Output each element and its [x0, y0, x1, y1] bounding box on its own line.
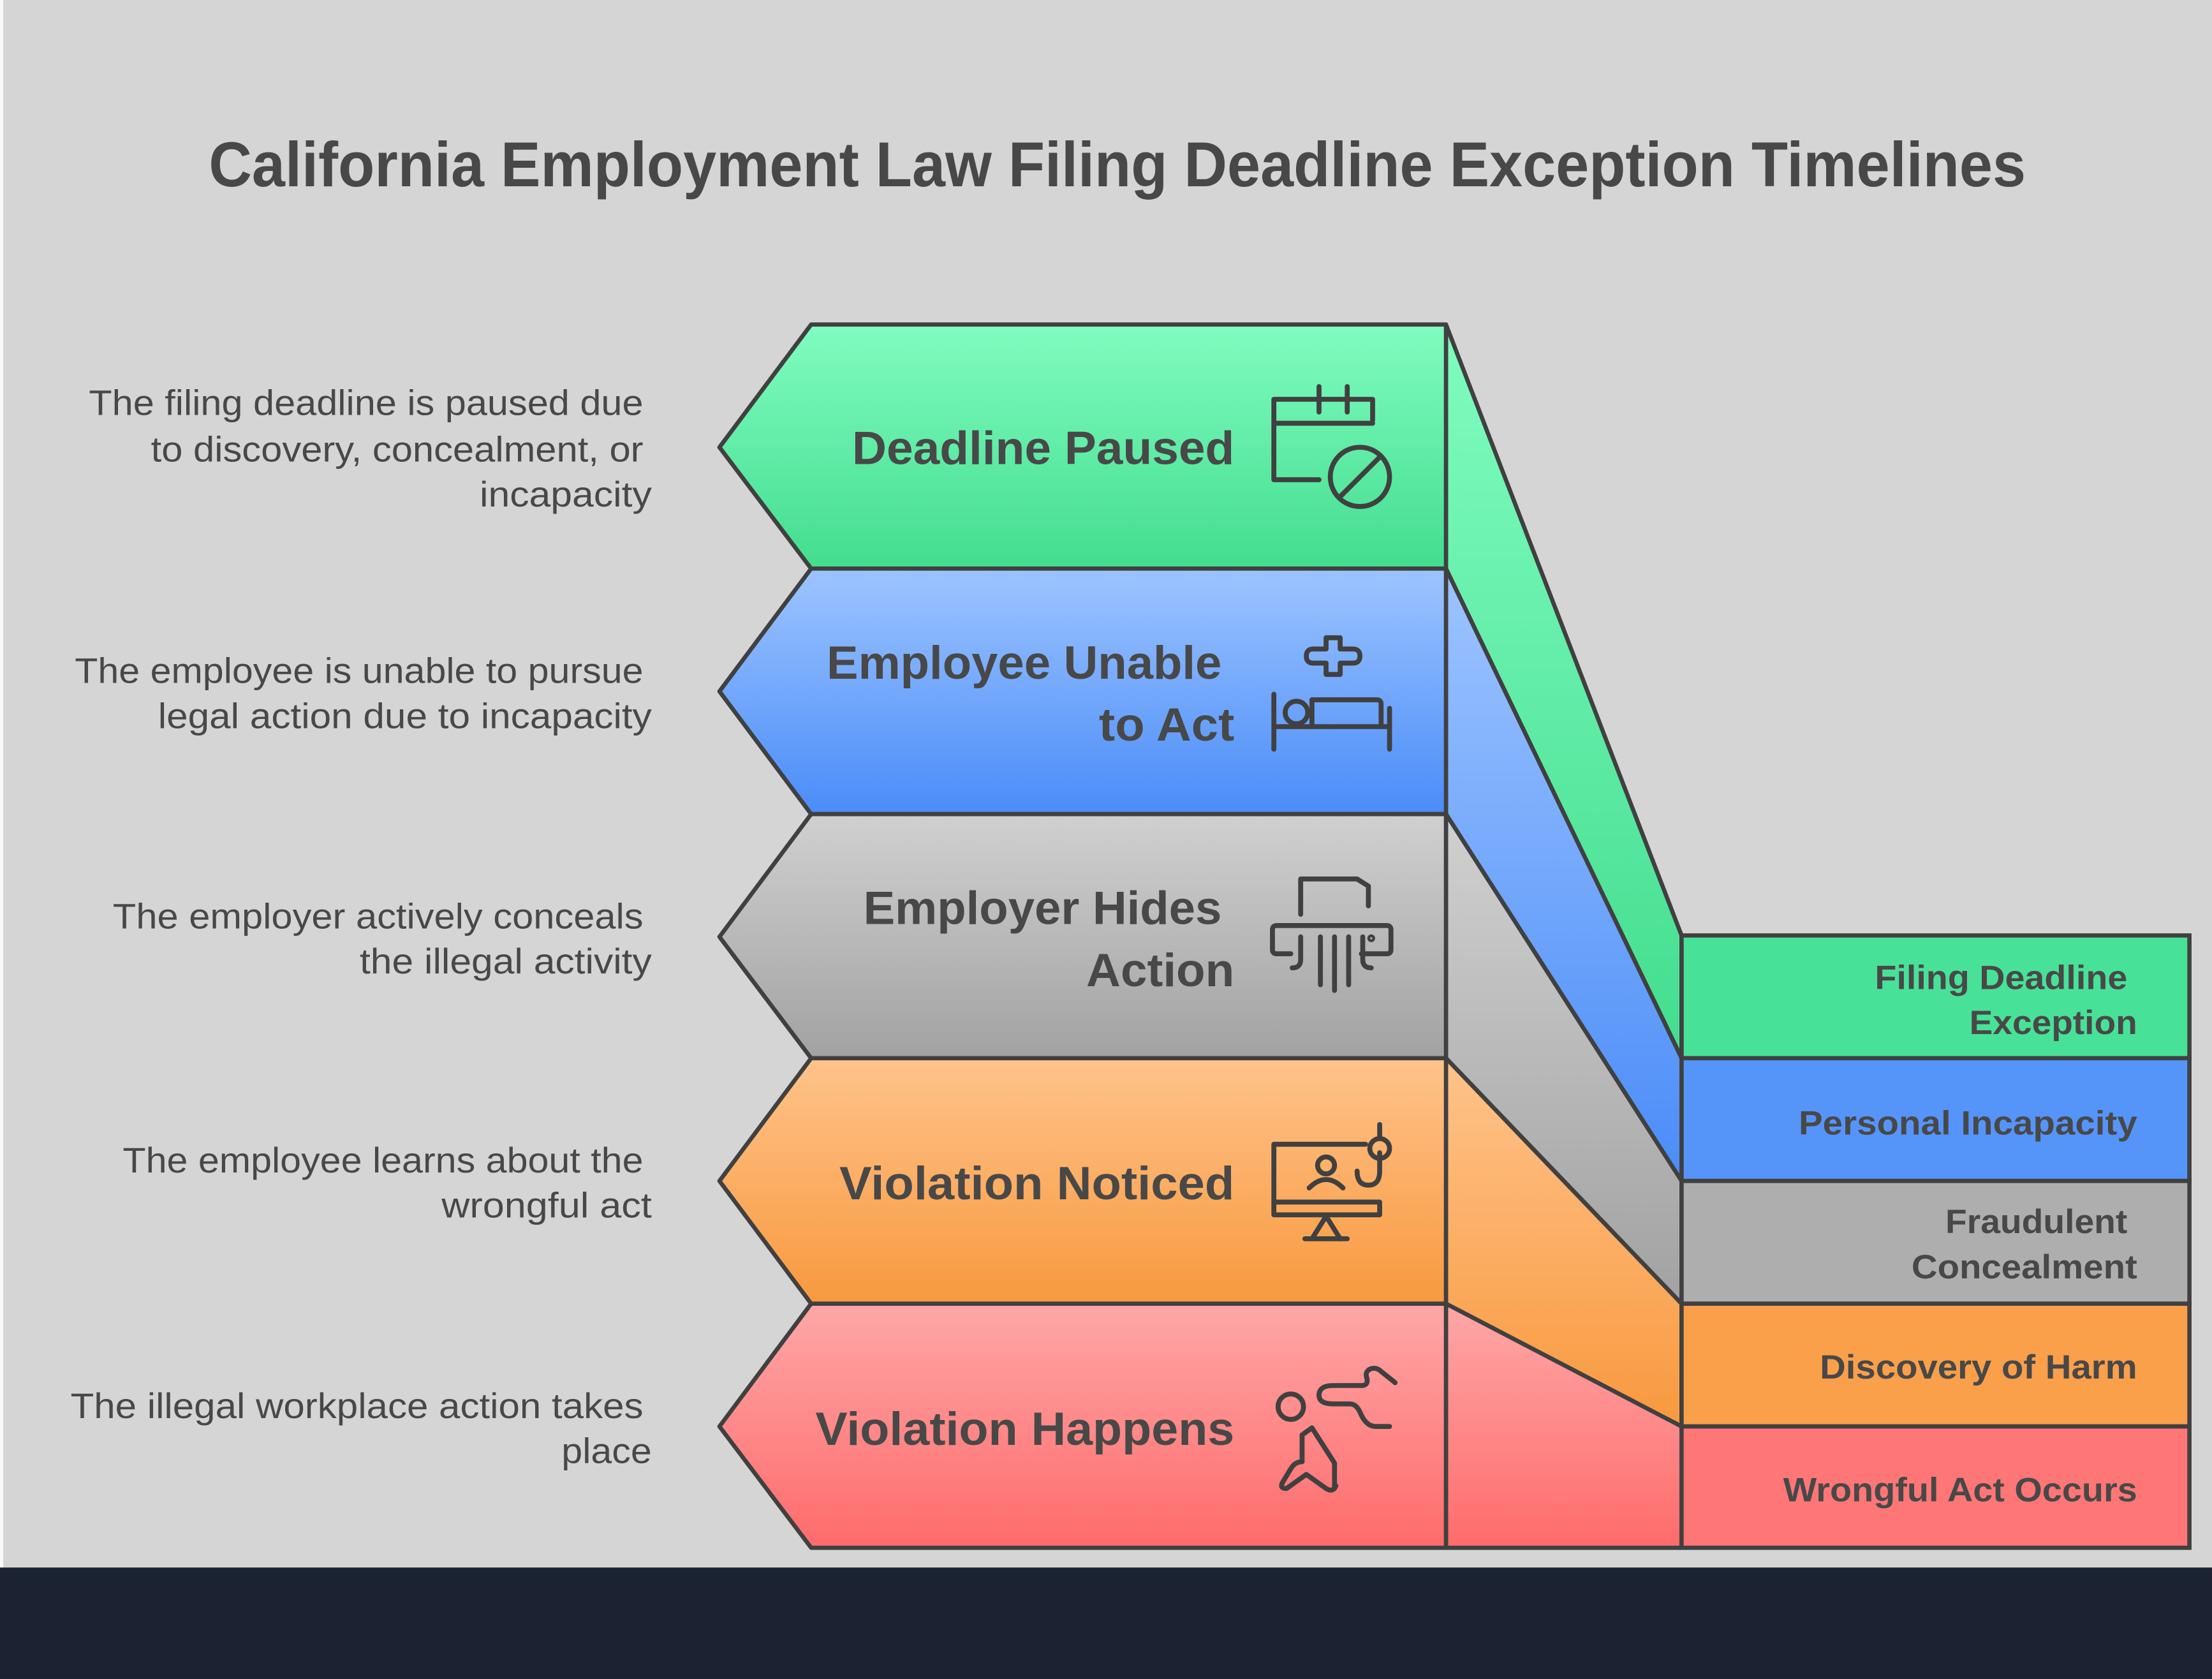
arrow labels [815, 423, 1234, 1455]
left descriptions: The filing deadline is paused due [89, 383, 644, 422]
face: blue [1446, 568, 1681, 1181]
right labels: Fraudulent [1945, 1203, 2128, 1241]
left descriptions: The employer actively conceals [113, 896, 644, 936]
right labels: Concealment [1912, 1248, 2137, 1286]
box: Filing Deadline Exception [1681, 935, 2190, 1058]
right boxes [1681, 935, 2190, 1548]
arrow labels: to Act [1099, 699, 1234, 751]
face: orange [1446, 1058, 1681, 1426]
arrow: Violation Noticed [719, 1058, 1446, 1304]
arrow labels: Action [1086, 945, 1234, 996]
left descriptions: The employee learns about the [122, 1141, 644, 1180]
arrow: Violation Happens [719, 1304, 1446, 1548]
side faces [1446, 325, 1681, 1548]
left descriptions: The employee is unable to pursue [75, 651, 644, 690]
left descriptions: legal action due to incapacity [158, 696, 652, 736]
left descriptions: wrongful act [441, 1186, 652, 1225]
arrow labels: Employee Unable [827, 637, 1221, 689]
arrow labels: Employer Hides [864, 883, 1221, 935]
box: Wrongful Act Occurs [1681, 1426, 2190, 1548]
box: Discovery of Harm [1681, 1304, 2190, 1426]
left descriptions [71, 383, 652, 1471]
left descriptions: The illegal workplace action takes [71, 1386, 644, 1426]
left descriptions: to discovery, concealment, or [151, 429, 644, 469]
icon: shredder [1272, 879, 1391, 991]
arrow labels: Deadline Paused [852, 423, 1234, 475]
footer band [0, 1567, 2212, 1679]
icon: sick bed [1274, 638, 1390, 749]
left descriptions: the illegal activity [360, 942, 652, 981]
right labels: Filing Deadline [1875, 959, 2127, 996]
box: Personal Incapacity [1681, 1058, 2190, 1181]
right labels: Exception [1970, 1004, 2137, 1042]
right labels: Discovery of Harm [1820, 1349, 2137, 1386]
icon: calendar paused [1274, 387, 1390, 507]
right labels [1783, 959, 2137, 1509]
arrow labels: Violation Happens [815, 1403, 1234, 1455]
icon: falling person [1278, 1368, 1395, 1490]
icon: monitor with person [1274, 1125, 1390, 1239]
box: Fraudulent Concealment [1681, 1181, 2190, 1304]
face: red [1446, 1304, 1681, 1548]
arrows [719, 325, 1446, 1548]
right labels: Wrongful Act Occurs [1783, 1471, 2137, 1509]
left descriptions: place [561, 1431, 652, 1471]
arrow: Deadline Paused [719, 325, 1446, 568]
face: green [1446, 325, 1681, 1058]
arrow labels: Violation Noticed [839, 1158, 1234, 1209]
face: gray [1446, 814, 1681, 1304]
left descriptions: incapacity [480, 475, 652, 514]
icons [1272, 387, 1395, 1490]
arrow: Employee Unable to Act [719, 568, 1446, 814]
arrow: Employer Hides Action [719, 814, 1446, 1058]
title: California Employment Law Filing Deadline Exception Timelines [209, 129, 2026, 200]
right labels: Personal Incapacity [1799, 1104, 2137, 1142]
